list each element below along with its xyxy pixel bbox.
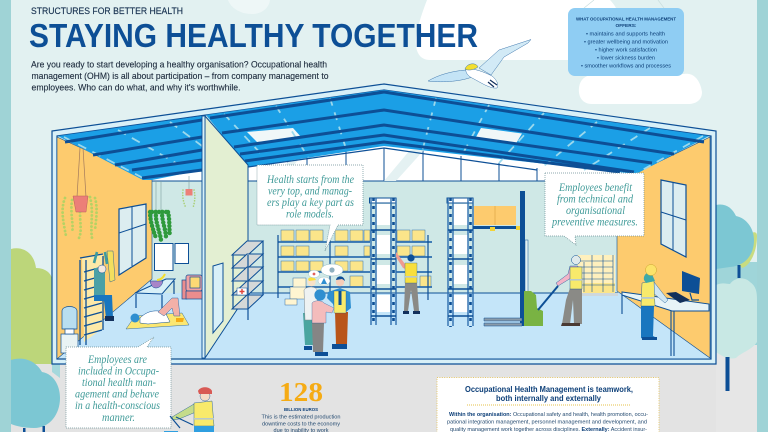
callout: management: role models.	[286, 208, 334, 220]
callout: technical measures: preventive measures.	[551, 216, 638, 228]
window: left wall	[119, 204, 146, 275]
clouds	[228, 0, 702, 104]
window: right wall	[661, 180, 686, 257]
callout: technical measures: Employees benefit	[558, 181, 633, 194]
callout: management: ers play a key part as	[267, 196, 354, 209]
statistic: 128 billion euros: 128	[279, 377, 323, 407]
armchair	[182, 275, 202, 299]
panel: teamwork: pational integration management, personnel management and development, and	[447, 420, 647, 426]
partition wall	[202, 116, 248, 358]
tree: right teal and green	[716, 205, 757, 278]
worker at computer	[641, 264, 668, 340]
right room: yellow wall	[617, 137, 710, 358]
plant: dark green hanging	[150, 181, 170, 240]
statistic: 128 billion euros	[262, 377, 341, 432]
panel: what OHM offers: OFFERS:	[615, 23, 637, 29]
panel: teamwork: Within the organisation: Occupational safety and health, health promotion, occu-	[449, 412, 648, 418]
warehouse shelving: left	[278, 230, 432, 300]
forklift	[473, 191, 558, 326]
tree: left green	[11, 248, 52, 364]
panel: what OHM offers: WHAT OCCUPATIONAL HEALTH MANAGEMENT	[576, 16, 676, 22]
callout: technical measures	[545, 173, 644, 245]
worker pulling pallet truck	[556, 256, 582, 326]
building shell	[52, 84, 716, 364]
left room: yellow wall	[57, 137, 152, 359]
statistic: 128 billion euros: BILLION EUROS	[284, 407, 318, 412]
warehouse rack: centre	[370, 198, 396, 326]
panel: teamwork	[437, 378, 659, 432]
icon: seagull	[428, 40, 531, 88]
callout: employees	[66, 337, 171, 428]
tree: left teal	[11, 359, 60, 432]
intro text: management (OHM) is all about participation – from company management to	[32, 71, 328, 81]
left room: back wall and floor	[57, 172, 202, 359]
callout: employees: Employees are	[87, 353, 147, 366]
panel: what OHM offers: • smoother workflows and processes	[581, 64, 672, 70]
panel: what OHM offers: • maintains and supports health	[586, 32, 665, 38]
callout: management: very top, and manag-	[268, 184, 352, 198]
panel: what OHM offers: • lower sickness burden	[597, 56, 655, 62]
wall bars with exercising man	[80, 251, 115, 345]
panel: what OHM offers: • greater wellbeing and motivation	[584, 40, 668, 46]
intro text: employees. Who can do what, and why it's worthwhile.	[32, 82, 240, 92]
callout: employees: manner.	[102, 411, 135, 424]
intro text	[31, 60, 328, 92]
intro text: Are you ready to start developing a healthy organisation? Occupational health	[31, 60, 327, 70]
subtitle: STRUCTURES FOR BETTER HEALTH	[31, 6, 183, 17]
statistic: 128 billion euros: downtime costs to the economy	[262, 422, 341, 428]
callout: management: Health starts from the	[266, 173, 354, 186]
plant: small hanging	[183, 176, 195, 208]
statistic: 128 billion euros: This is the estimated production	[262, 414, 341, 420]
wall shelf with first aid kit	[232, 241, 263, 320]
callout: employees: agement and behave	[75, 388, 159, 401]
pictures on back wall	[154, 244, 188, 270]
group of managers talking	[303, 276, 351, 356]
roof: left section	[58, 116, 202, 180]
callout: employees: in a health-conscious	[75, 399, 160, 412]
callout: technical measures: organisational	[566, 204, 625, 217]
right room: back wall and floor	[205, 146, 710, 358]
pallet of boxes	[576, 255, 618, 296]
crates behind managers	[285, 278, 306, 305]
panel: teamwork: both internally and externally	[496, 394, 602, 403]
plant: large hanging pot	[63, 148, 97, 238]
thought bubbles	[308, 264, 343, 285]
water dispenser	[61, 306, 78, 353]
roof: right section	[206, 90, 709, 174]
callout: management	[257, 165, 363, 251]
desk with monitor	[622, 271, 709, 356]
callout: technical measures: from technical and	[557, 192, 633, 206]
worker at shelves	[396, 252, 420, 314]
panel: teamwork: Occupational Health Management is teamwork,	[465, 385, 633, 394]
table with fruit bowl	[135, 274, 175, 309]
warehouse rack: right	[447, 198, 473, 327]
title: STAYING HEALTHY TOGETHER	[29, 18, 478, 55]
callout: employees: tional health man-	[82, 376, 156, 389]
cyclist	[164, 387, 214, 432]
panel: what OHM offers: • higher work satisfaction	[595, 48, 657, 54]
woman doing yoga on mat	[126, 298, 189, 329]
callout: employees: included in Occupa-	[78, 364, 159, 378]
tree: right pale	[716, 278, 757, 391]
panel: what OHM offers	[568, 0, 684, 76]
